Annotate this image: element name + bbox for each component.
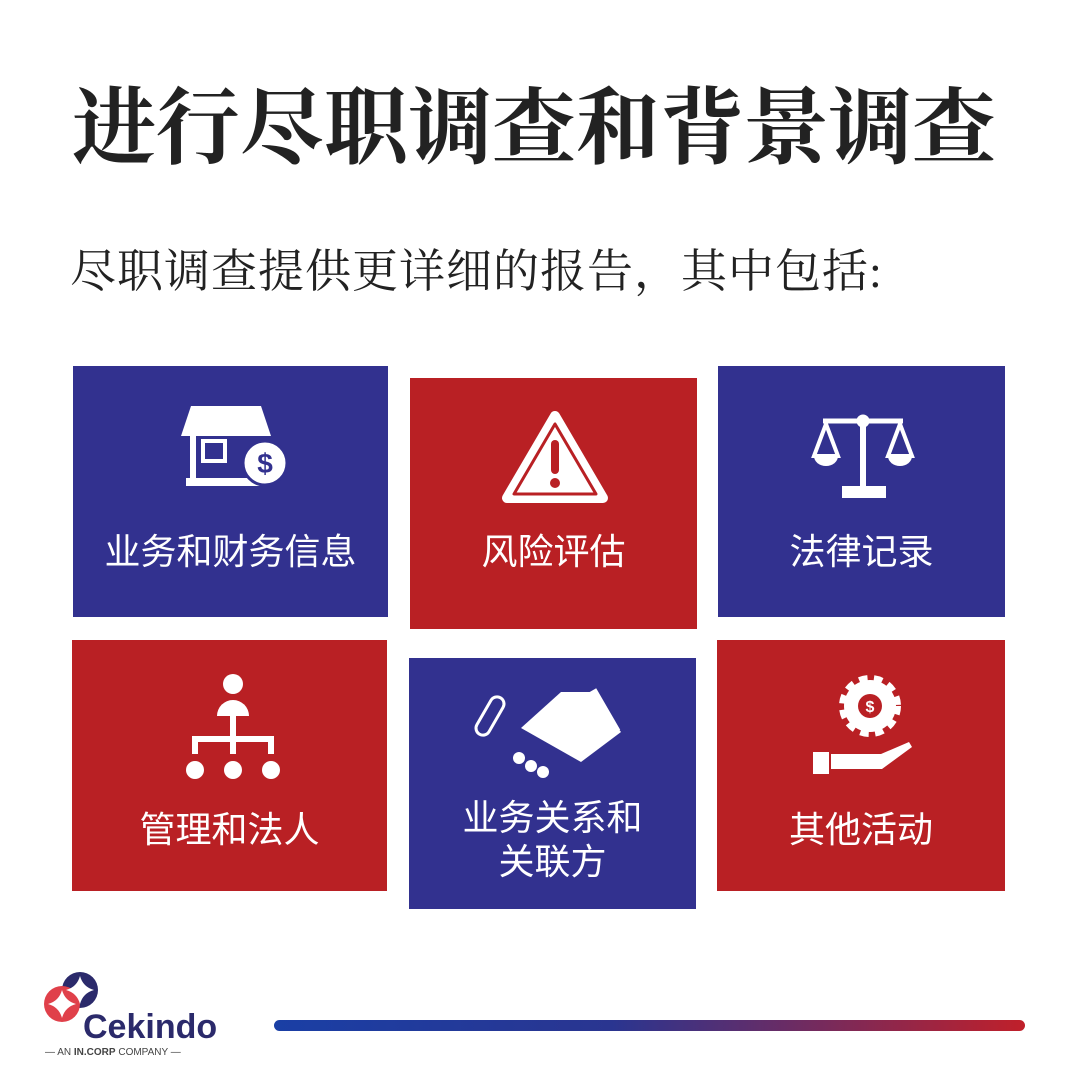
label: 关联方 xyxy=(498,841,606,882)
label: 业务关系和 xyxy=(462,797,642,838)
panel: management and legal persons xyxy=(72,640,387,891)
label xyxy=(462,797,642,882)
label: 风险评估 xyxy=(481,531,626,572)
label: 业务和财务信息 xyxy=(104,531,356,572)
icon: gear with dollar on hand: $ xyxy=(866,699,875,716)
icon: org chart xyxy=(186,674,280,779)
icon: store with dollar: $ xyxy=(257,448,273,479)
label: 管理和法人 xyxy=(139,809,320,850)
label: 法律记录 xyxy=(789,531,934,572)
label: 其他活动 xyxy=(789,809,933,850)
panel: business and financial info xyxy=(73,366,388,617)
icon: handshake xyxy=(474,688,621,778)
subtitle: 尽职调查提供更详细的报告，其中包括: xyxy=(70,246,883,297)
gradient bar xyxy=(274,1020,1025,1031)
logo: Cekindo: Cekindo xyxy=(83,1008,217,1046)
panel: other activities xyxy=(717,640,1005,891)
panel: business relationships xyxy=(409,658,696,909)
panel: legal records xyxy=(718,366,1005,617)
icon: store with dollar xyxy=(181,406,286,486)
logo: Cekindo: — AN IN.CORP COMPANY — xyxy=(45,1047,181,1058)
title: 进行尽职调查和背景调查 xyxy=(72,83,996,176)
icon: warning triangle xyxy=(502,411,608,503)
panel: risk assessment xyxy=(410,378,697,629)
icon: scales xyxy=(811,414,915,498)
icon: gear with dollar on hand xyxy=(813,675,912,774)
logo: Cekindo xyxy=(44,972,217,1058)
